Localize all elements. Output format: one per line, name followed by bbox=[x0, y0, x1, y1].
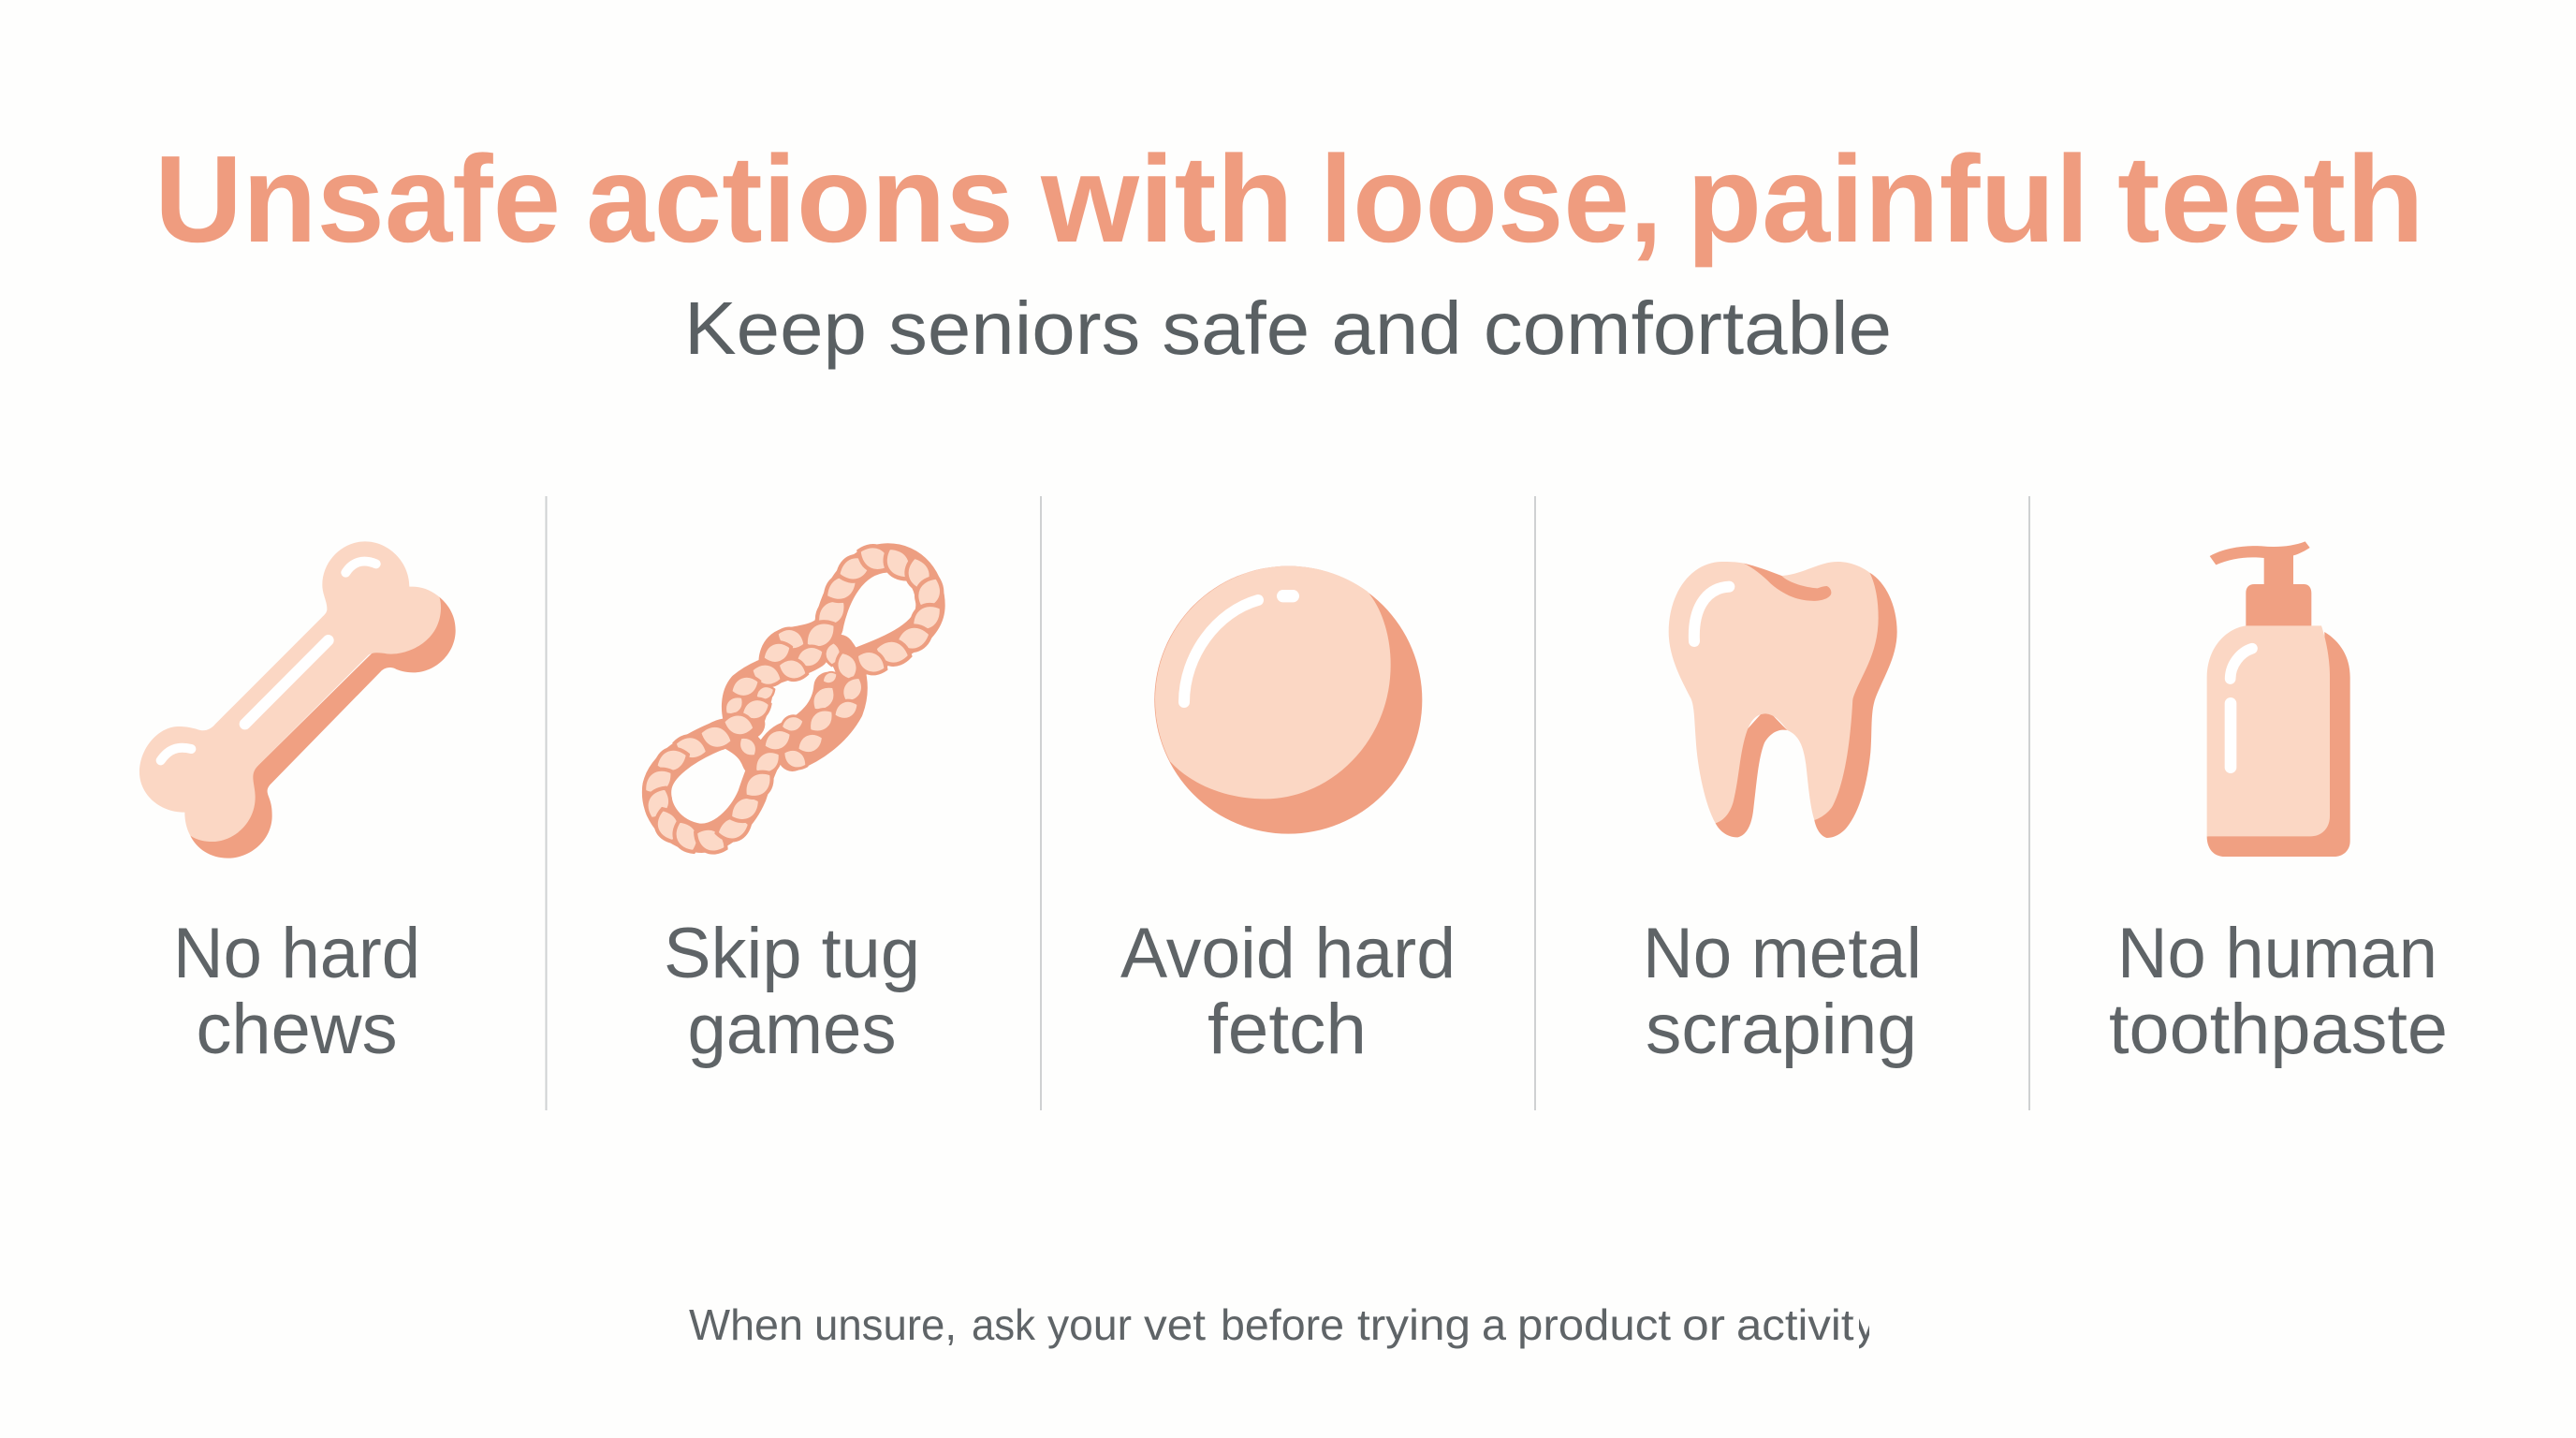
footer note: a bbox=[1482, 1300, 1506, 1349]
footer note: or bbox=[1682, 1300, 1725, 1349]
label: avoid hard fetch: fetch bbox=[1208, 990, 1367, 1069]
panel: avoid hard fetch bbox=[1120, 566, 1456, 1069]
footer note: unsure, bbox=[814, 1300, 957, 1349]
label: no hard chews: chews bbox=[197, 990, 397, 1069]
panel: no hard chews bbox=[139, 541, 456, 1069]
title: painful bbox=[1687, 130, 2089, 268]
footer note bbox=[689, 1309, 1869, 1348]
icon: bone bbox=[139, 541, 456, 858]
panel: no human toothpaste bbox=[2109, 541, 2448, 1069]
footer note: trying bbox=[1357, 1300, 1471, 1349]
title: with bbox=[1040, 130, 1294, 268]
label: no human toothpaste: toothpaste bbox=[2109, 990, 2448, 1069]
label: no metal scraping bbox=[1643, 914, 1922, 1069]
label: no metal scraping: No metal bbox=[1643, 914, 1922, 993]
label: avoid hard fetch: Avoid hard bbox=[1120, 914, 1456, 993]
label: avoid hard fetch bbox=[1120, 914, 1456, 1069]
title: actions bbox=[586, 130, 1014, 268]
icon: pump bottle bbox=[2207, 541, 2350, 857]
panel: no metal scraping bbox=[1643, 562, 1922, 1069]
label: skip tug games: games bbox=[687, 990, 897, 1069]
title: teeth bbox=[2117, 130, 2424, 268]
footer note: vet bbox=[1144, 1300, 1206, 1349]
subtitle: Keep seniors safe and comfortable bbox=[684, 286, 1892, 370]
title: Unsafe bbox=[154, 130, 561, 268]
label: no human toothpaste: No human bbox=[2117, 914, 2437, 993]
footer note: ask bbox=[972, 1300, 1036, 1349]
icon: ball bbox=[1154, 566, 1422, 834]
label: no human toothpaste bbox=[2109, 914, 2448, 1069]
label: no metal scraping: scraping bbox=[1646, 990, 1917, 1069]
label: skip tug games bbox=[664, 914, 920, 1069]
title: loose, bbox=[1320, 130, 1662, 268]
icon: rope bbox=[637, 540, 948, 858]
icon: tooth bbox=[1669, 562, 1897, 838]
footer note: activity bbox=[1736, 1300, 1877, 1349]
label: no hard chews bbox=[173, 914, 420, 1069]
label: skip tug games: Skip tug bbox=[664, 914, 920, 993]
footer note: your bbox=[1047, 1300, 1132, 1349]
label: no hard chews: No hard bbox=[173, 914, 420, 993]
footer note: product bbox=[1517, 1300, 1671, 1349]
title bbox=[154, 130, 2424, 268]
panel: skip tug games bbox=[637, 540, 948, 1069]
footer note: When bbox=[689, 1300, 803, 1349]
footer note: before bbox=[1221, 1300, 1344, 1349]
